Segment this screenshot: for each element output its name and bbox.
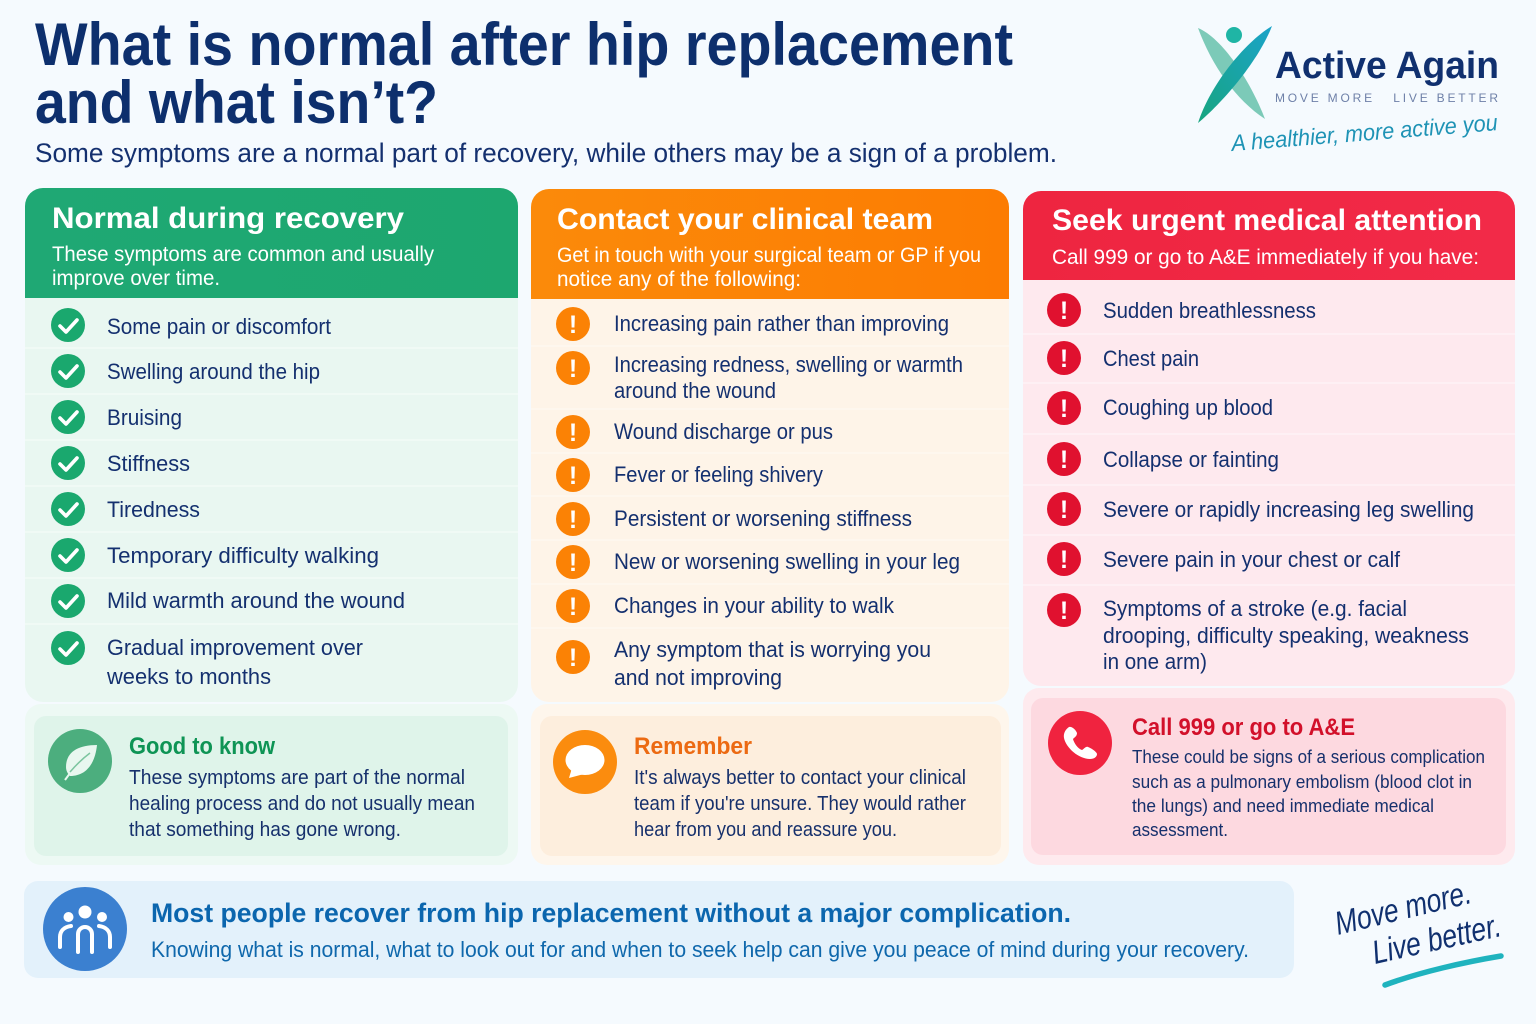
call 999 text: the lungs) and need immediate medical [1132, 795, 1434, 816]
item: leg swelling [556, 545, 960, 579]
panel: contact your clinical team [531, 189, 1009, 702]
item: stroke: in one arm) [1103, 649, 1207, 674]
item: bruising [51, 400, 182, 434]
item: collapse [1047, 442, 1279, 476]
item: chest pain: Chest pain [1103, 346, 1199, 371]
item: breathlessness [1047, 293, 1316, 327]
item: gradual improvement [51, 631, 363, 689]
callout: call 999: Call 999 or go to A&E [1132, 714, 1355, 741]
logo strapline: MOVE MORE LIVE BETTER [1275, 91, 1498, 105]
item: gradual improvement: Gradual improvement over [107, 635, 363, 660]
banner: most people recover [24, 881, 1294, 978]
logo name: Active Again [1275, 45, 1499, 87]
item: fever: Fever or feeling shivery [614, 462, 824, 487]
item: tiredness: Tiredness [107, 497, 200, 522]
item: persistent stiffness: ! [569, 506, 577, 534]
handwritten sign-off [1331, 873, 1504, 985]
green header: These symptoms are common and usually [52, 243, 434, 266]
item: any symptom: ! [569, 644, 577, 672]
subtitle: Some symptoms are a normal part of recovery, while others may be a sign of a problem. [35, 138, 1057, 168]
green header: Normal during recovery [52, 202, 404, 235]
orange header: Get in touch with your surgical team or GP if you [557, 244, 981, 267]
remember text: hear from you and reassure you. [634, 819, 897, 841]
item: stroke: drooping, difficulty speaking, weakness [1103, 623, 1469, 648]
item: chest pain: ! [1060, 345, 1068, 373]
call 999 text: such as a pulmonary embolism (blood clot in [1132, 771, 1472, 792]
item: mild warmth [51, 584, 405, 618]
item: breathlessness: ! [1060, 297, 1068, 325]
icon: active figure [1198, 26, 1272, 123]
item: difficulty walking: Temporary difficulty walking [107, 543, 379, 568]
item: ability to walk: ! [569, 593, 577, 621]
good to know text [129, 767, 475, 841]
item: increasing pain: ! [569, 311, 577, 339]
item: severe pain: Severe pain in your chest or calf [1103, 547, 1401, 572]
red header: Seek urgent medical attention [1052, 204, 1482, 237]
icon: leaf [48, 729, 112, 793]
item: chest pain [1047, 341, 1199, 375]
item: persistent stiffness [556, 502, 912, 536]
item: some pain [51, 308, 332, 342]
item: fever [556, 458, 824, 492]
orange header: notice any of the following: [557, 268, 801, 291]
title: What is normal after hip replacement [35, 11, 1013, 78]
item: increasing redness: Increasing redness, swelling or warmth [614, 352, 963, 377]
item: stroke: ! [1060, 597, 1068, 625]
banner: most people recover: Most people recover from hip replacement without a major complication. [151, 898, 1071, 928]
item: leg swelling severe [1047, 492, 1474, 526]
item: mild warmth: Mild warmth around the wound [107, 588, 405, 613]
item: coughing blood [1047, 391, 1273, 425]
title: and what isn’t? [35, 69, 438, 136]
item: stroke: Symptoms of a stroke (e.g. facial [1103, 596, 1407, 621]
item: leg swelling severe: ! [1060, 496, 1068, 524]
item: leg swelling: ! [569, 549, 577, 577]
item: swelling [51, 354, 320, 388]
item: swelling: Swelling around the hip [107, 359, 320, 384]
good to know text: healing process and do not usually mean [129, 793, 475, 815]
icon: speech bubble [553, 730, 617, 794]
item: any symptom [556, 637, 931, 690]
item: difficulty walking [51, 538, 379, 572]
item: stiffness: Stiffness [107, 451, 190, 476]
green header: improve over time. [52, 267, 220, 290]
item: wound discharge: Wound discharge or pus [614, 419, 833, 444]
item: ability to walk: Changes in your ability to walk [614, 593, 895, 618]
item: leg swelling severe: Severe or rapidly increasing leg swelling [1103, 497, 1474, 522]
callout: remember [531, 704, 1009, 865]
item: severe pain [1047, 542, 1401, 576]
item: any symptom: Any symptom that is worrying you [614, 637, 931, 662]
red header: Call 999 or go to A&E immediately if you have: [1052, 246, 1479, 269]
item: fever: ! [569, 462, 577, 490]
item: tiredness [51, 492, 200, 526]
item: coughing blood: ! [1060, 395, 1068, 423]
call 999 text: assessment. [1132, 819, 1228, 840]
red header [1023, 191, 1515, 280]
panel: seek urgent medical attention [1023, 191, 1515, 686]
remember text [634, 767, 966, 841]
item: wound discharge: ! [569, 419, 577, 447]
callout: good to know: Good to know [129, 733, 275, 760]
item: any symptom: and not improving [614, 665, 782, 690]
item: increasing pain: Increasing pain rather than improving [614, 311, 949, 336]
callout: remember: Remember [634, 733, 752, 760]
call 999 text [1132, 746, 1485, 840]
item: increasing redness: ! [569, 355, 577, 383]
orange header: Contact your clinical team [557, 203, 933, 236]
item: gradual improvement: weeks to months [106, 664, 271, 689]
item: bruising: Bruising [107, 405, 182, 430]
item: breathlessness: Sudden breathlessness [1103, 298, 1316, 323]
item: coughing blood: Coughing up blood [1103, 395, 1273, 420]
item: collapse: Collapse or fainting [1103, 447, 1279, 472]
handwritten sign-off: Move more. [1331, 873, 1475, 942]
item: wound discharge [556, 415, 833, 449]
item: collapse: ! [1060, 446, 1068, 474]
orange header [531, 189, 1009, 299]
banner: most people recover: Knowing what is normal, what to look out for and when to seek help can give you peace of mind during your recovery. [151, 937, 1249, 962]
call 999 text: These could be signs of a serious complication [1132, 746, 1485, 767]
item: some pain: Some pain or discomfort [107, 314, 332, 339]
title [35, 11, 1013, 136]
item: increasing redness [556, 351, 963, 403]
icon: people group [43, 887, 127, 971]
good to know text: that something has gone wrong. [129, 819, 401, 841]
item: increasing pain [556, 307, 949, 341]
callout: good to know [25, 704, 518, 865]
item: stroke [1047, 593, 1469, 674]
panel: normal during recovery [25, 188, 518, 702]
logo tagline: A healthier, more active you [1228, 109, 1499, 156]
logo: Active Again [1198, 26, 1499, 156]
item: leg swelling: New or worsening swelling in your leg [614, 549, 960, 574]
item: persistent stiffness: Persistent or worsening stiffness [614, 506, 912, 531]
remember text: It's always better to contact your clinical [634, 767, 966, 789]
icon: phone [1048, 711, 1112, 775]
item: increasing redness: around the wound [614, 378, 776, 403]
remember text: team if you're unsure. They would rather [634, 793, 966, 815]
good to know text: These symptoms are part of the normal [129, 767, 465, 789]
item: ability to walk [556, 589, 895, 623]
item: stiffness [51, 446, 190, 480]
handwritten sign-off: Live better. [1369, 906, 1504, 971]
callout: call 999 [1023, 688, 1515, 865]
green header [25, 188, 518, 298]
item: severe pain: ! [1060, 546, 1068, 574]
